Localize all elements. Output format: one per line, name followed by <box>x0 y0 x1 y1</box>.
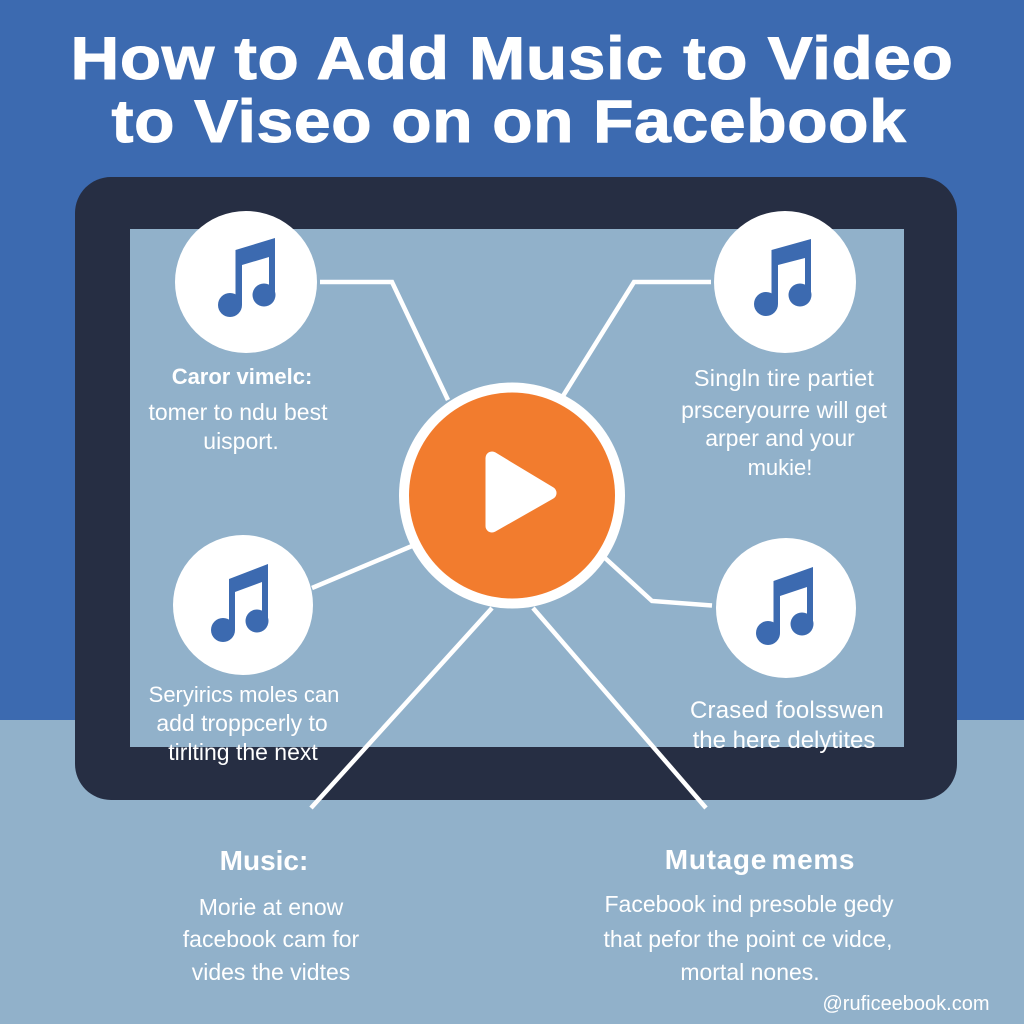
icon: music note middle left <box>173 535 313 675</box>
text block: top left: tomer to ndu best <box>148 399 328 425</box>
connector lines <box>311 282 712 808</box>
text block: top right: Singln tire partiet <box>694 365 874 391</box>
text block: top left <box>148 364 328 454</box>
text block: middle left <box>149 682 339 765</box>
icon: music note middle right <box>716 538 856 678</box>
text block: top right: arper and your <box>705 425 855 451</box>
text block: middle right: the here delytites <box>693 727 875 754</box>
text block: top right <box>681 365 887 480</box>
title: to Viseo on on Facebook <box>111 88 907 155</box>
title: How to Add Music to Video <box>70 25 954 92</box>
text block: bottom left: facebook cam for <box>183 926 359 952</box>
text block: top left: Caror vimelc: <box>172 364 312 389</box>
text block: bottom right: that pefor the point ce vidce, <box>604 926 892 952</box>
handle: @ruficeebook.com <box>822 993 990 1015</box>
text block: middle right <box>690 697 884 754</box>
text block: top left: uisport. <box>203 428 279 454</box>
text block: top right: prsceryourre will get <box>681 397 887 423</box>
tablet frame <box>75 177 957 800</box>
icon: music note top left <box>175 211 317 353</box>
text block: bottom right: Mutage mems <box>665 844 855 875</box>
text block: bottom right <box>604 844 894 985</box>
text block: bottom right: Facebook ind presoble gedy <box>605 891 893 917</box>
text block: middle right: Crased foolsswen <box>690 697 884 724</box>
text block: middle left: Seryirics moles can <box>149 682 339 707</box>
text block: middle left: tirlting the next <box>168 739 318 765</box>
play button <box>399 382 625 608</box>
text block: bottom left: Music: <box>220 845 308 876</box>
text block: bottom right: mortal nones. <box>680 959 820 985</box>
title <box>70 25 954 155</box>
text block: bottom left: vides the vidtes <box>192 959 350 985</box>
text block: top right: mukie! <box>748 455 812 480</box>
text block: bottom left: Morie at enow <box>199 894 343 920</box>
text block: bottom left <box>183 845 359 985</box>
icon: music note top right <box>714 211 856 353</box>
text block: middle left: add troppcerly to <box>156 710 328 736</box>
